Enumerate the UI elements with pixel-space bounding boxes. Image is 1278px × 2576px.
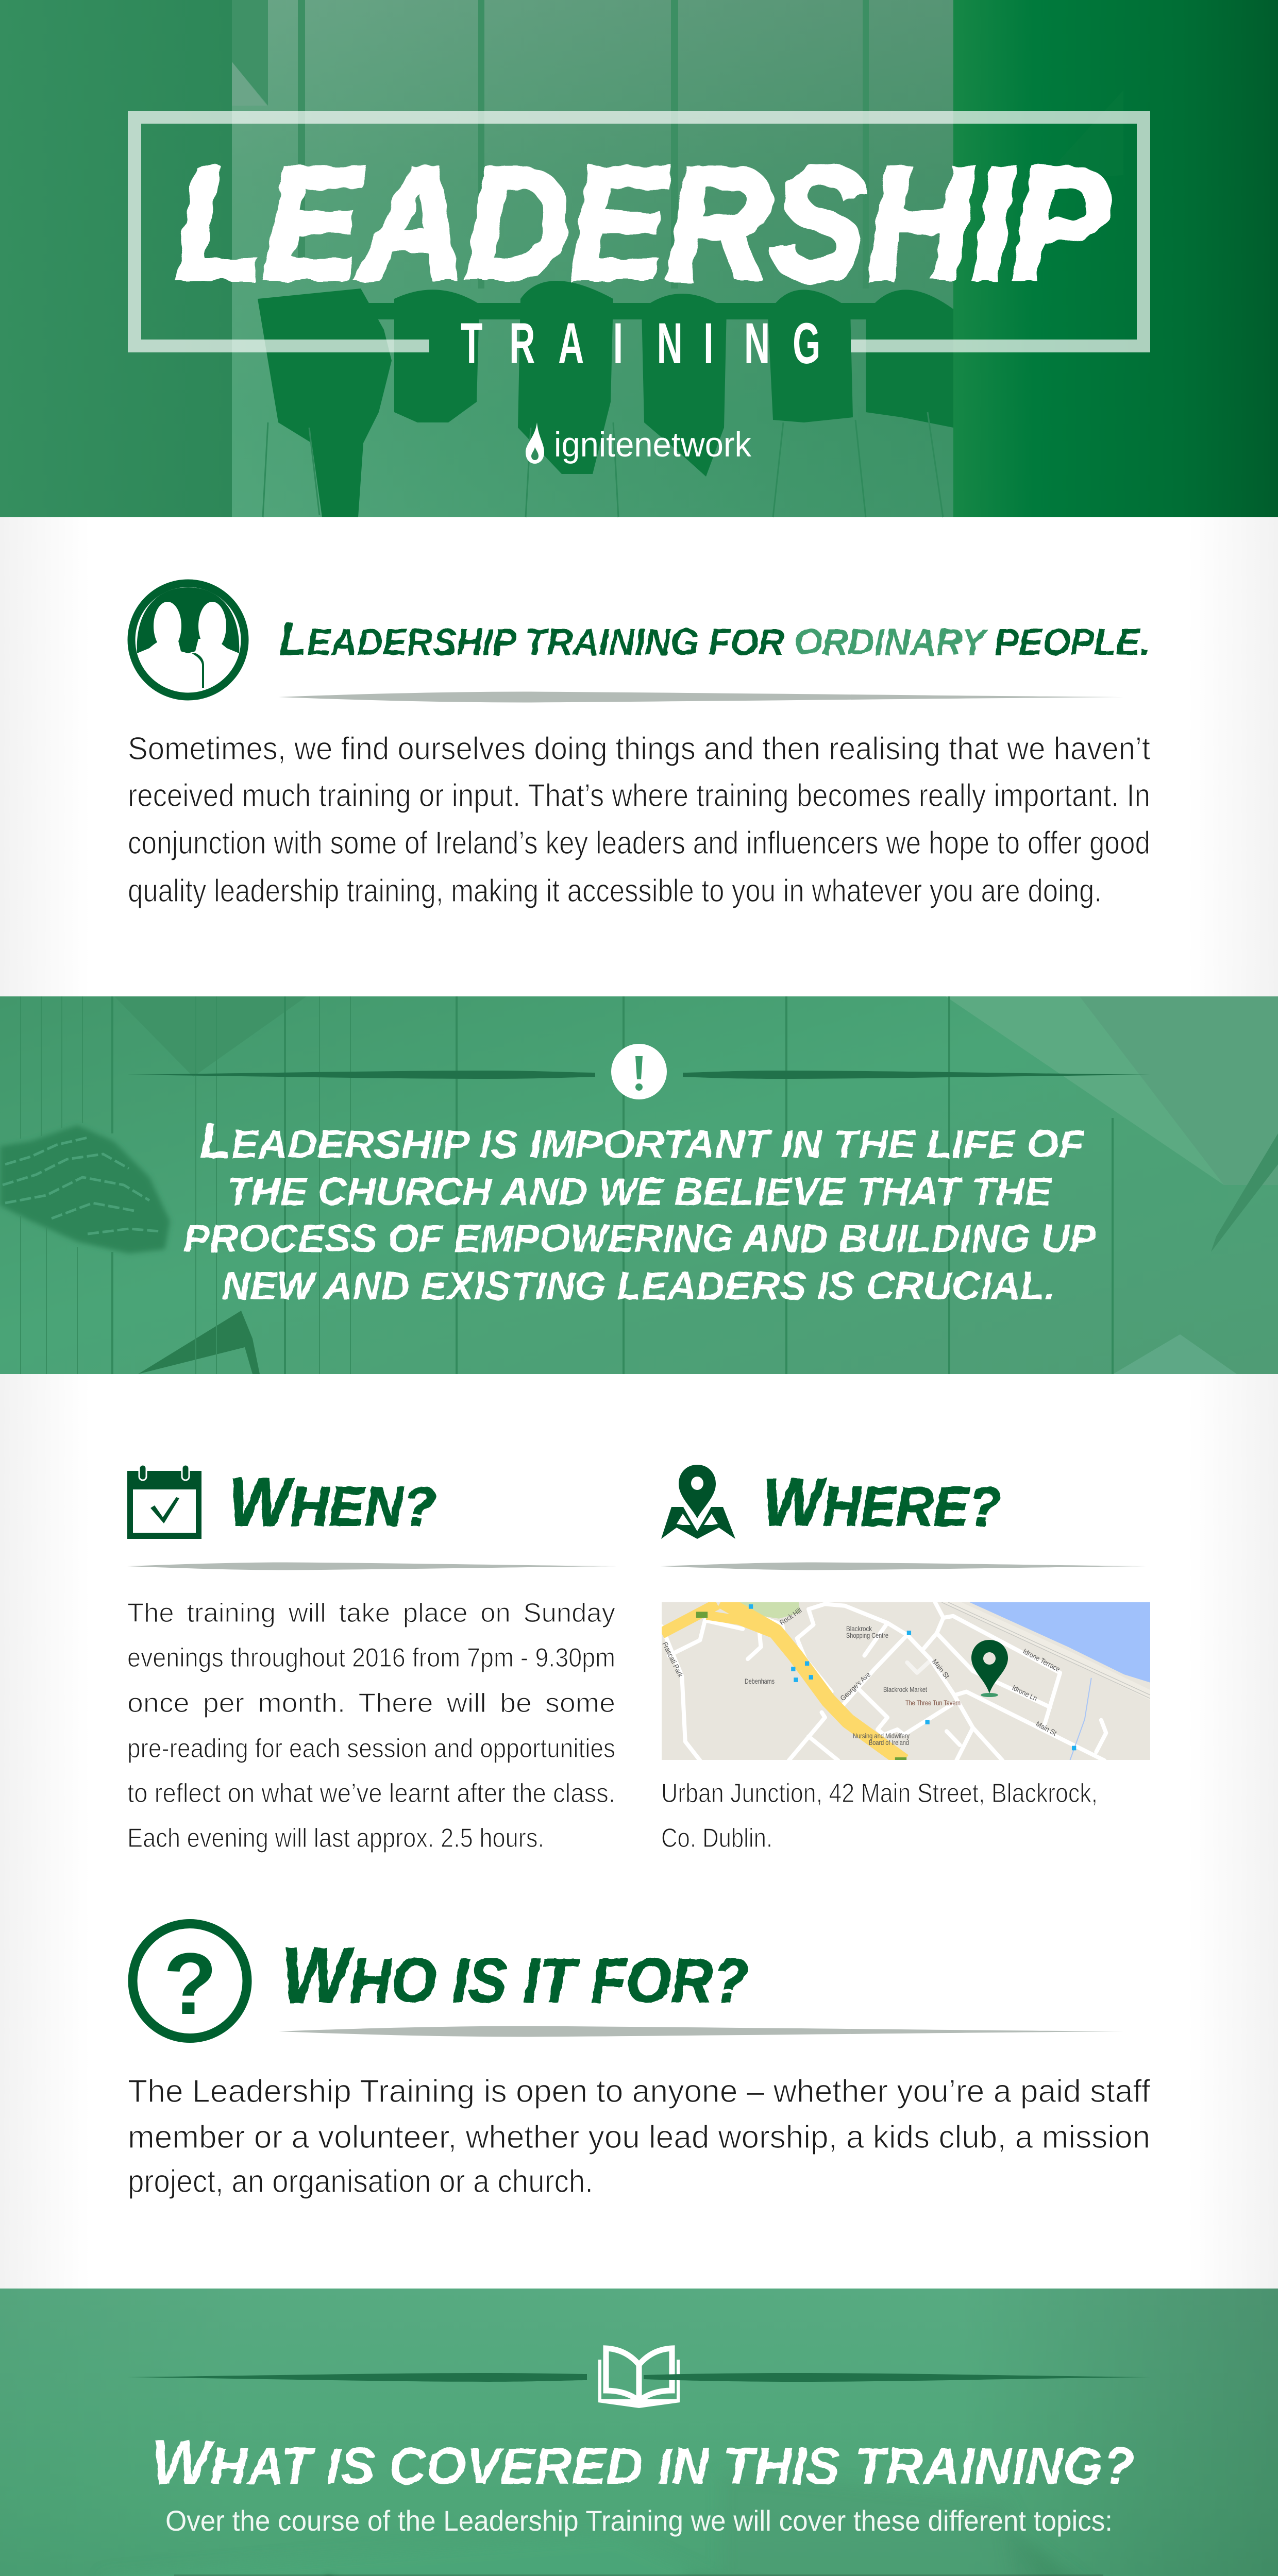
- text block: who body: member or a volunteer, whether you lead worship, a kids club, a mission: [128, 2120, 1150, 2155]
- panel: who is it for: [128, 1924, 1151, 2199]
- text block: when body: Each evening will last approx. 2.5 hours.: [127, 1823, 544, 1853]
- divider: [127, 1562, 620, 1570]
- header photo background: [0, 0, 1278, 517]
- map: Debenhams: [745, 1677, 775, 1685]
- wood photo background: [0, 996, 1278, 1374]
- map: Idrone Ln: [1011, 1683, 1038, 1702]
- text block: intro body: Sometimes, we find ourselves doing things and then realising that we haven’t: [128, 731, 1150, 767]
- quote text: NEW AND EXISTING LEADERS IS CRUCIAL.: [222, 1264, 1055, 1308]
- logo: ignitenetwork white: ignitenetwork: [554, 425, 752, 464]
- text block: who body: The Leadership Training is open to anyone – whether you’re a paid staff: [128, 2074, 1151, 2109]
- text block: when body: to reflect on what we’ve learnt after the class.: [127, 1778, 615, 1808]
- divider: left: [128, 1071, 595, 1079]
- quote text: THE CHURCH AND WE BELIEVE THAT THE: [227, 1170, 1052, 1214]
- text block: intro body: quality leadership training, making it accessible to you in whatever you are doing.: [128, 873, 1102, 909]
- heading: LEADERSHIP TRAINING FOR ORDINARY PEOPLE.: [279, 613, 1150, 665]
- row bands: [174, 2574, 1103, 2576]
- panel: when: [127, 1464, 620, 1853]
- heading: Where?: WHERE?: [762, 1464, 1001, 1540]
- map: Rock Hill: [778, 1606, 803, 1626]
- divider: [279, 691, 1124, 703]
- map: The Three Tun Tavern: [905, 1699, 961, 1707]
- map: Shopping Centre: [846, 1631, 888, 1639]
- quote text: [183, 1114, 1096, 1308]
- heading: When?: WHEN?: [228, 1464, 436, 1540]
- panel: header: [0, 0, 1278, 517]
- divider: right: [683, 1071, 1150, 1079]
- panel: where: [660, 1464, 1151, 1853]
- icon: open book: [598, 2348, 680, 2408]
- text block: address: Co. Dublin.: [661, 1823, 772, 1853]
- icon: calendar: [127, 1465, 201, 1539]
- text block: when body: evenings throughout 2016 from 7pm - 9.30pm: [127, 1643, 615, 1673]
- text block: address: [661, 1778, 1098, 1853]
- text block: when body: once per month. There will be some: [127, 1688, 615, 1718]
- panel: intro: [128, 583, 1150, 909]
- panel: quote: [0, 996, 1278, 1374]
- map: Blackrock: [846, 1624, 872, 1633]
- quote text: PROCESS OF EMPOWERING AND BUILDING UP: [183, 1217, 1096, 1261]
- text block: who body: [128, 2074, 1151, 2199]
- map: Frascati Park: [661, 1640, 685, 1679]
- divider: [660, 1562, 1150, 1570]
- text block: who body: project, an organisation or a church.: [128, 2164, 593, 2199]
- icon: map pin: [661, 1465, 735, 1539]
- books photo background: [0, 2289, 1278, 2576]
- heading: What is covered in this training?: WHAT IS COVERED IN THIS TRAINING?: [151, 2427, 1134, 2497]
- text block: intro body: received much training or input. That’s where training becomes really important. In: [128, 778, 1150, 814]
- text block: intro body: [128, 731, 1150, 909]
- map: Blackrock Market: [883, 1685, 927, 1693]
- heading: Who is it for?: WHO IS IT FOR?: [281, 1931, 748, 2019]
- topics list: [174, 2574, 1103, 2576]
- map: Main St: [1035, 1720, 1058, 1737]
- panel: what is covered: [0, 2289, 1278, 2576]
- map: George's Ave: [838, 1670, 872, 1702]
- icon: two people in circle: [131, 583, 245, 697]
- icon: exclamation circle: [611, 1044, 667, 1099]
- text block: when body: [127, 1598, 615, 1853]
- icon: question mark circle: ?: [163, 1935, 217, 2033]
- divider: left: [128, 2373, 587, 2382]
- text block: when body: The training will take place on Sunday: [127, 1598, 615, 1628]
- subheading: Over the course of the Leadership Training we will cover these different topics:: [165, 2504, 1113, 2537]
- map: Nursing and Midwifery: [853, 1732, 910, 1740]
- icon: question mark circle: [133, 1924, 247, 2038]
- map: [661, 1601, 1151, 1761]
- quote text: LEADERSHIP IS IMPORTANT IN THE LIFE OF: [199, 1114, 1085, 1168]
- map: Main St: [931, 1657, 951, 1680]
- map: Board of Ireland: [869, 1738, 909, 1747]
- title frame: [128, 111, 1150, 352]
- map: Idrone Terrace: [1022, 1647, 1062, 1673]
- title: Leadership: LEADERSHIP: [175, 133, 1109, 312]
- subtitle: Training: TRAINING: [461, 311, 820, 376]
- pine cone: [0, 1125, 170, 1253]
- divider: [279, 2026, 1124, 2037]
- divider: right: [644, 2373, 1150, 2382]
- text block: address: Urban Junction, 42 Main Street, Blackrock,: [661, 1778, 1098, 1808]
- text block: when body: pre-reading for each session and opportunities: [127, 1734, 615, 1764]
